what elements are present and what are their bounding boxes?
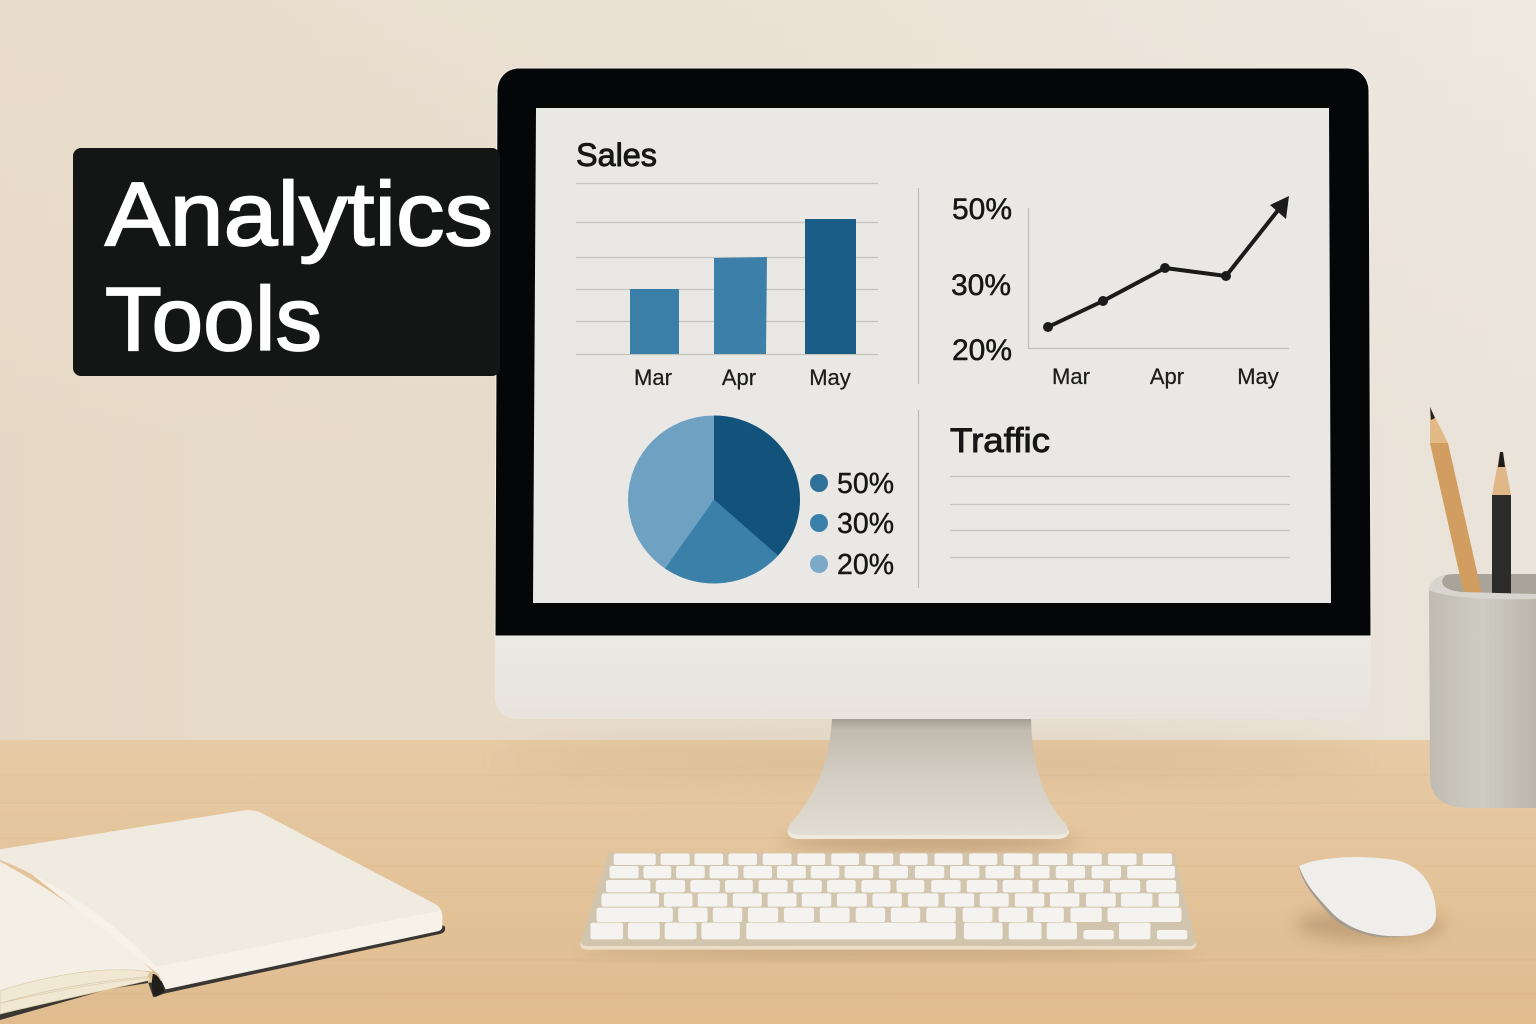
bar: Mar [630, 289, 679, 354]
monitor stand [788, 718, 1069, 839]
y axis labels: 30% [951, 269, 1011, 302]
sales month labels [634, 365, 851, 390]
y axis labels: 50% [952, 193, 1012, 226]
panel: sales bar chart [576, 137, 878, 390]
line chart month labels [1052, 364, 1279, 389]
pie slices [628, 416, 800, 584]
left page edges [0, 970, 150, 1014]
monitor bezel [495, 68, 1371, 636]
wooden desk [0, 740, 1536, 1024]
wall background [0, 0, 1536, 741]
y axis labels: 20% [952, 334, 1012, 367]
panel: pie chart [628, 416, 894, 584]
pencil: tan [1430, 407, 1482, 594]
line chart month labels: Mar [1052, 364, 1090, 389]
sales month labels: Apr [722, 365, 756, 390]
divider lower [918, 410, 920, 588]
title box [73, 148, 500, 376]
title box: Tools [105, 270, 322, 370]
monitor screen [533, 108, 1331, 603]
traffic lines [950, 476, 1290, 558]
sales month labels: May [809, 365, 851, 390]
bar: May [805, 219, 856, 354]
line chart month labels: Apr [1150, 364, 1184, 389]
sales month labels: Mar [634, 365, 672, 390]
y axis labels [951, 193, 1012, 367]
mouse [1299, 857, 1436, 937]
arrow head [1270, 196, 1289, 219]
sales grid lines [576, 184, 878, 354]
title box: Analytics [105, 165, 493, 265]
pie legend [810, 468, 894, 581]
pencil cup front [1429, 575, 1536, 808]
notebook [0, 810, 445, 1020]
monitor chin [495, 630, 1371, 719]
data points [1043, 263, 1231, 332]
notebook cover [0, 920, 445, 1020]
left page [0, 862, 153, 991]
panel: traffic [950, 422, 1290, 558]
pencil: black [1492, 452, 1511, 594]
pie legend: 30% [837, 508, 894, 540]
soft desk shadows [500, 740, 1445, 956]
keys [590, 853, 1187, 939]
panel: line chart [951, 193, 1289, 389]
keyboard front lip [580, 942, 1196, 950]
trend line [1048, 209, 1279, 327]
keyboard [580, 853, 1196, 950]
monitor [495, 68, 1371, 719]
right page block [0, 810, 442, 989]
keyboard case [580, 853, 1196, 949]
bar: Apr [714, 257, 767, 354]
chart axes [1028, 208, 1289, 348]
right page surface [0, 810, 439, 967]
divider upper [918, 188, 920, 384]
notebook spine [152, 974, 164, 997]
line chart month labels: May [1237, 364, 1279, 389]
heading: sales: Sales [576, 137, 657, 173]
heading: traffic: Traffic [950, 422, 1050, 460]
pie legend: 50% [837, 468, 894, 500]
pie legend: 20% [837, 549, 894, 581]
pencil cup back [1429, 574, 1536, 598]
